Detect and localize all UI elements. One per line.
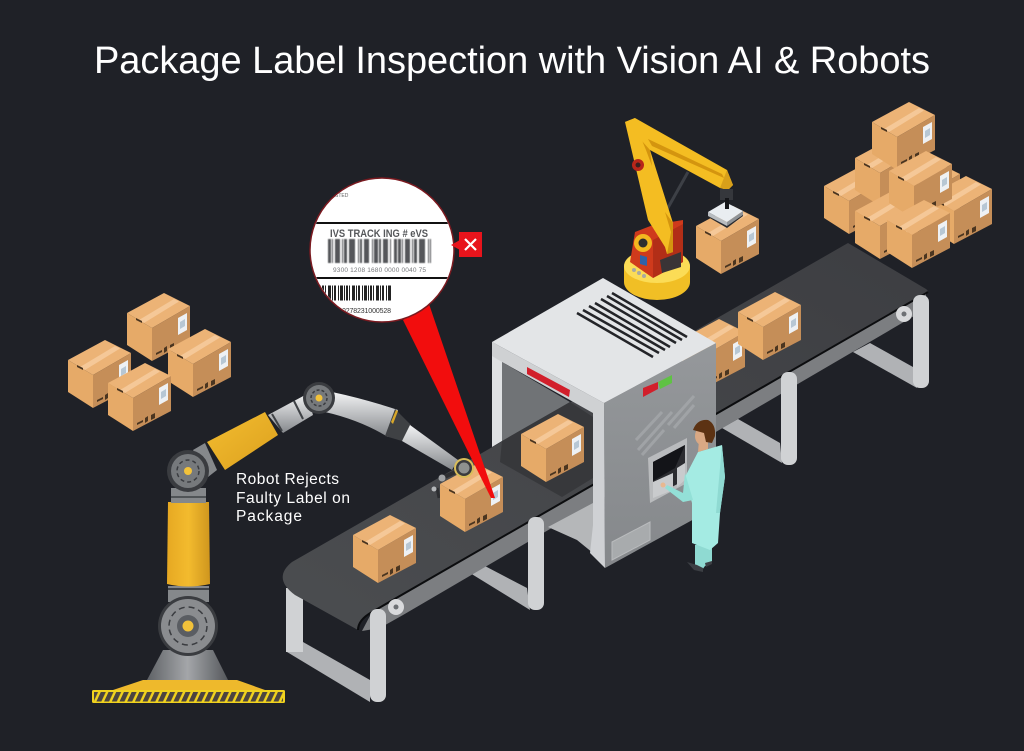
arm: base joint: [158, 596, 218, 656]
machine: left pillar: [492, 342, 502, 447]
arm: base plate: [113, 680, 265, 690]
arm: base stripe: [92, 690, 285, 703]
arm: forearm taper: [402, 425, 458, 470]
arm: lower neck: [168, 586, 209, 602]
box inside machine: [521, 414, 584, 482]
box pile: right: [824, 102, 992, 268]
machine: front pillar: [590, 403, 605, 568]
robot: top palletising arm: [624, 118, 733, 300]
magnified label: STED: [335, 193, 349, 199]
arm caption: [236, 471, 350, 525]
box under inspection: [440, 464, 503, 532]
machine: vents: [577, 293, 687, 357]
arm: wrist: [268, 394, 313, 433]
box held by top robot: [696, 198, 759, 274]
machine: hatch: [612, 522, 650, 560]
arm: upper neck: [171, 488, 206, 503]
robot: rejecting arm: [92, 382, 460, 703]
magnified label: 9300 1208 1680 0000 0040 75: [333, 267, 426, 274]
box on belt: front: [353, 515, 416, 583]
operator: [660, 420, 725, 572]
arm: shoulder joint: [167, 450, 209, 492]
inspection machine: [492, 278, 716, 568]
machine: opening back wall: [502, 362, 570, 441]
conveyor leg bars: [286, 343, 917, 702]
machine: lintel: [492, 342, 604, 417]
arm caption: Faulty Label on: [236, 490, 350, 507]
machine: right face: [604, 343, 716, 568]
machine: top face: [492, 278, 716, 403]
arm: forearm cuff: [385, 409, 411, 441]
machine: under-belt floor plate: [548, 503, 593, 553]
conveyor rollers and uprights: [370, 295, 929, 702]
arm: connector: [193, 443, 217, 477]
arm: gripper joint: [454, 458, 474, 478]
box pile: left: [68, 293, 231, 431]
arm caption: Robot Rejects: [236, 471, 339, 488]
arm caption: Package: [236, 508, 302, 525]
machine: status lights: [643, 382, 658, 397]
machine: glass highlights: [636, 396, 694, 455]
machine: opening shadow on belt: [500, 402, 593, 497]
arm: upper segment: [207, 412, 278, 470]
arm: gripper fingers: [442, 470, 460, 478]
arm: cone: [147, 650, 228, 680]
reject marker: [451, 232, 482, 257]
conveyor belt: [283, 243, 928, 631]
arm: vertical segment: [167, 502, 210, 586]
boxes behind machine on belt: [682, 292, 801, 387]
magnified label: IVS TRACK ING # eVS: [330, 228, 428, 240]
red scan beam: [403, 304, 495, 498]
title: Package Label Inspection with Vision AI & Robots: [94, 40, 930, 82]
magnified label: 0278231000528: [342, 308, 391, 315]
machine: red lintel light: [527, 367, 570, 397]
arm: forearm: [325, 392, 398, 437]
machine: control panel: [648, 438, 687, 503]
magnified label: [309, 177, 455, 323]
arm: elbow joint: [303, 382, 335, 414]
